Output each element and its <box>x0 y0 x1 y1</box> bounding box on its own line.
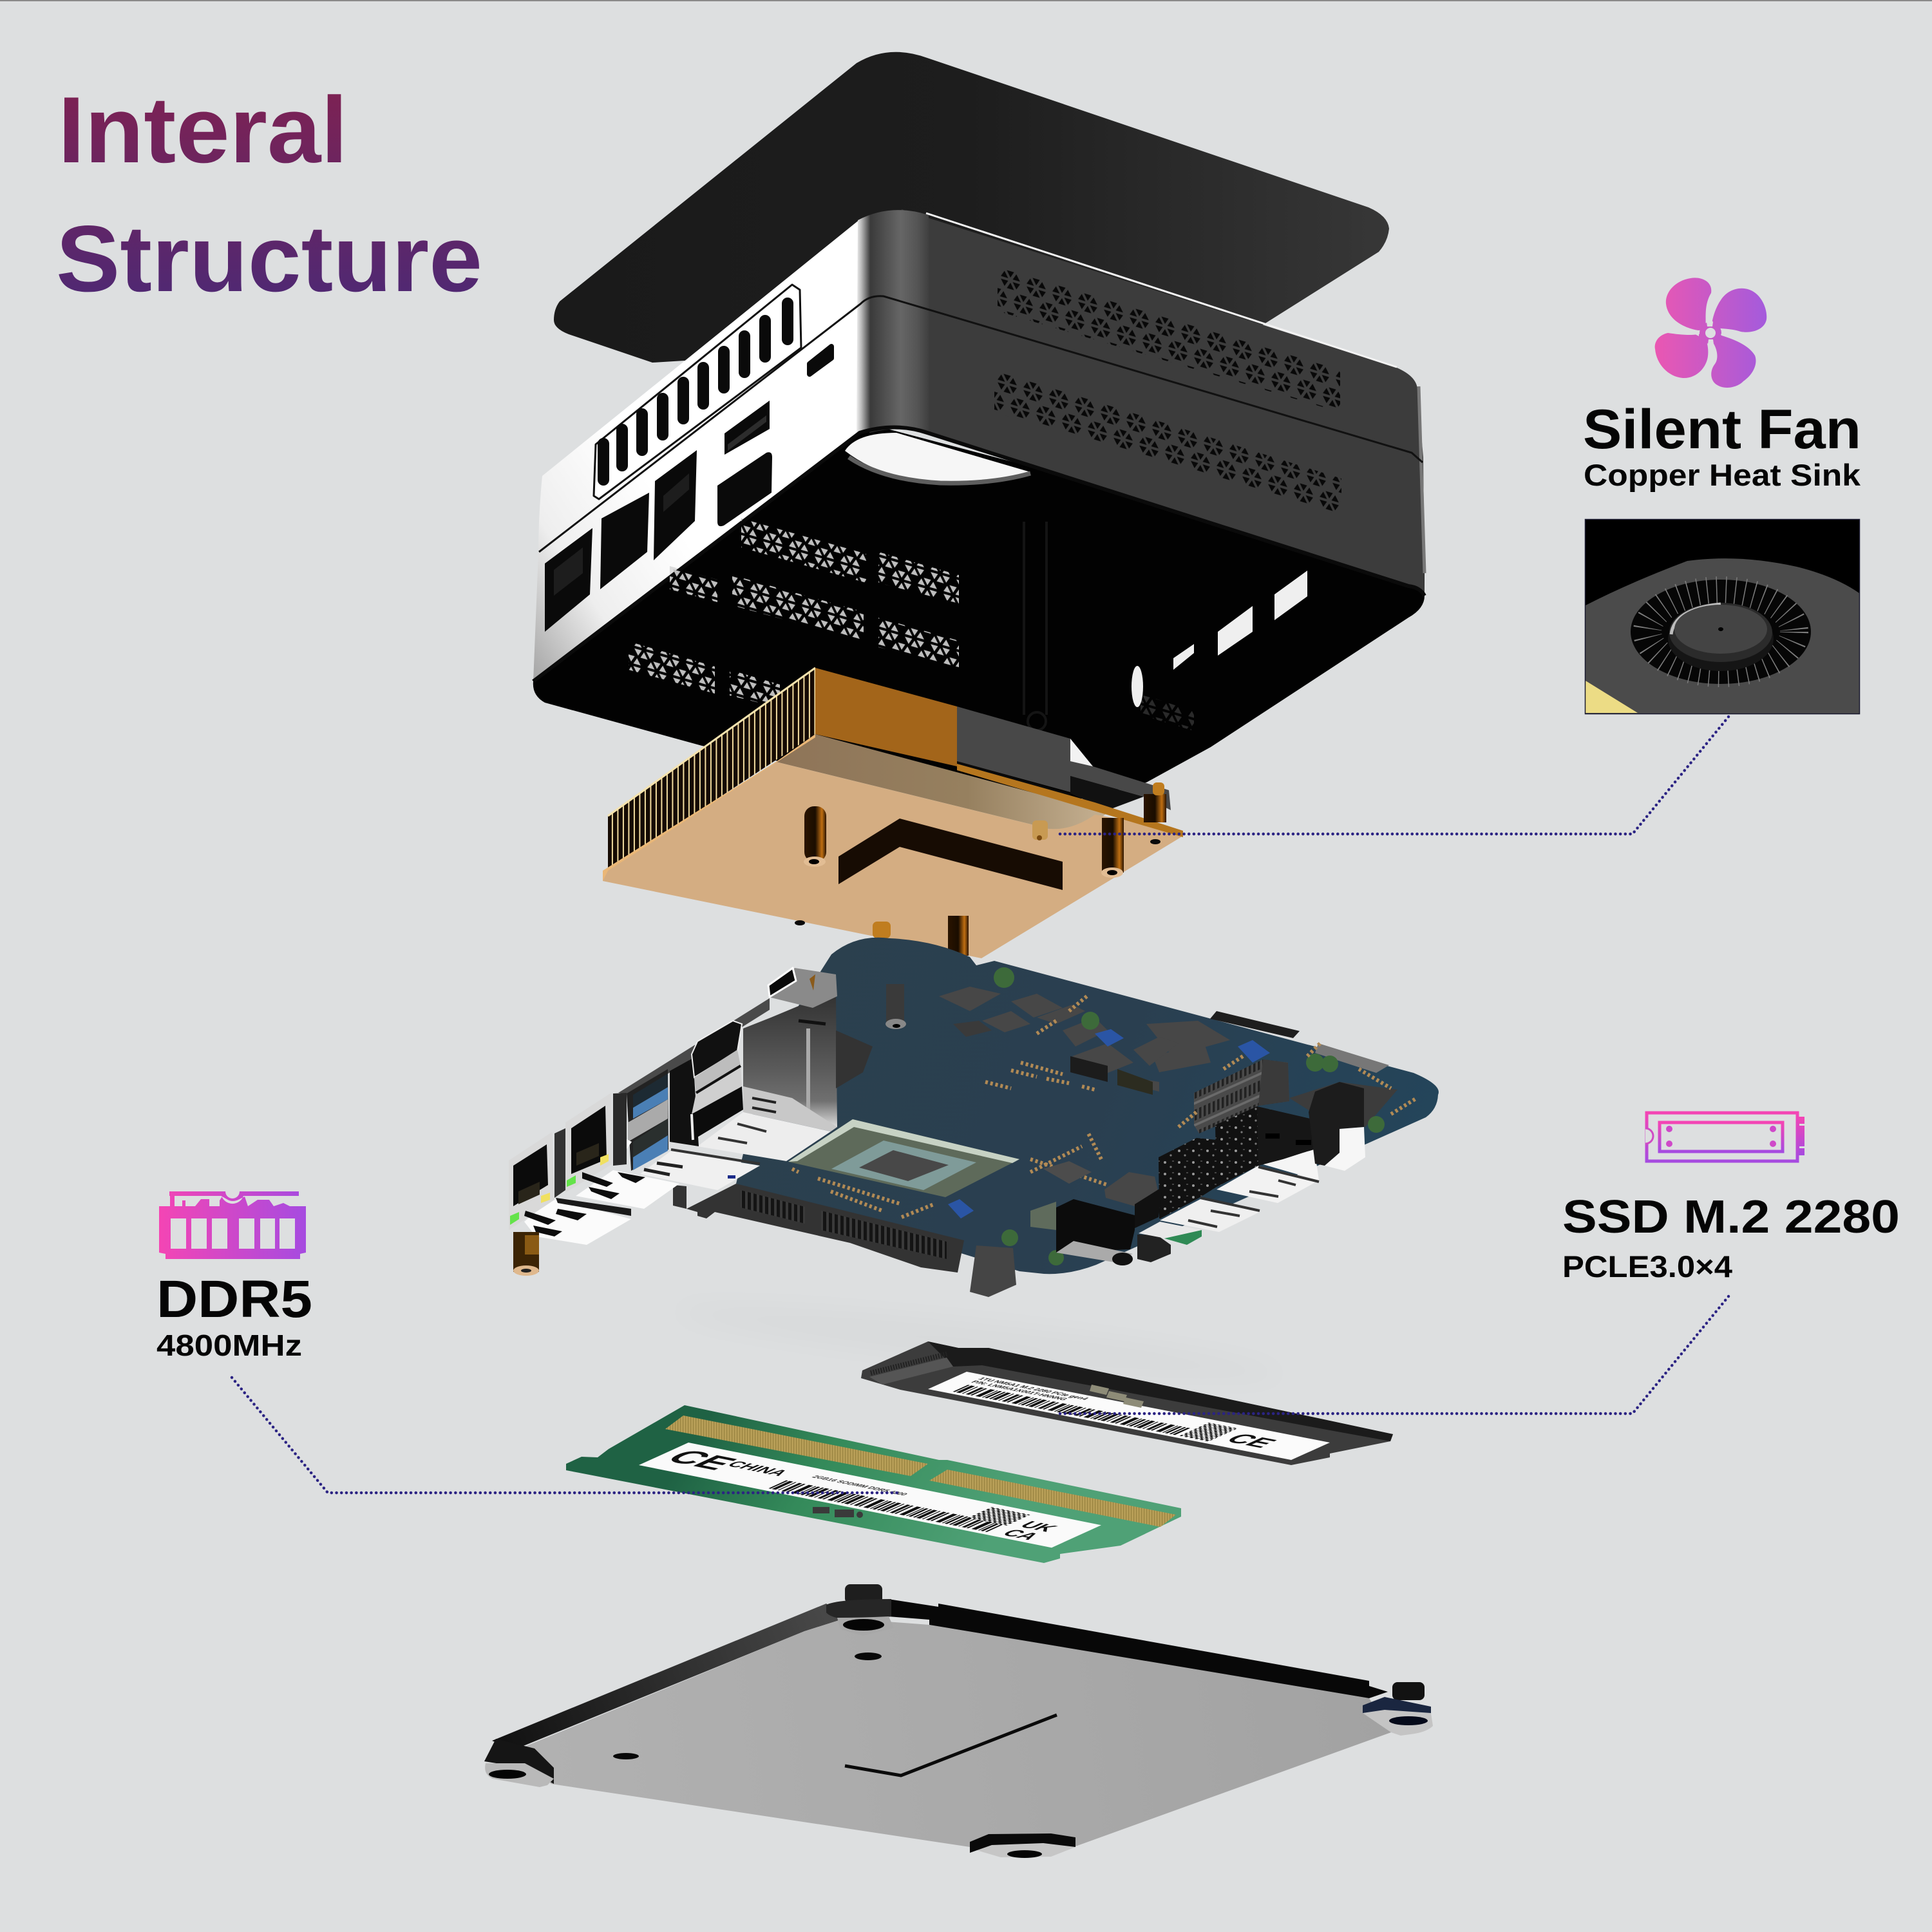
fan housing gray <box>957 706 1171 810</box>
motherboard <box>509 938 1439 1297</box>
dark column <box>670 1058 699 1146</box>
front slots <box>594 285 801 499</box>
top post <box>826 1584 894 1636</box>
brass standoff <box>513 1232 539 1276</box>
white block HDMI <box>697 1112 831 1161</box>
HDMI white A <box>1217 1166 1319 1203</box>
taupe face <box>776 734 1108 832</box>
RAM label: UK <box>1014 1519 1063 1534</box>
plate holes <box>795 839 1160 925</box>
black back edge <box>888 1599 1388 1698</box>
audio jack <box>1056 1199 1171 1265</box>
board edge strip <box>618 998 770 1095</box>
subheading: copper heat sink: Copper Heat Sink <box>1584 458 1861 492</box>
leader: silent fan <box>1060 717 1728 834</box>
blue chips <box>948 1029 1270 1218</box>
M.2 socket <box>1194 1059 1289 1133</box>
LAN port 1 <box>554 1093 679 1209</box>
rear IO openings <box>1132 571 1307 707</box>
RAM chips <box>813 1507 863 1518</box>
green chips <box>994 967 1385 1265</box>
copper pads <box>792 995 1417 1217</box>
case interior <box>533 422 1425 811</box>
SSD label <box>928 1372 1330 1460</box>
side vents <box>994 266 1341 514</box>
block 2 <box>1215 1106 1314 1187</box>
L-shaped slot <box>838 819 1063 890</box>
USB ports <box>619 1069 668 1171</box>
icon: fan <box>1655 278 1766 388</box>
copper heat sink <box>603 668 1183 958</box>
plate surface <box>517 1618 1391 1847</box>
RAM label: 2GB16 SODIMM DDR5 4800 <box>810 1475 909 1497</box>
plate holes <box>613 1653 882 1759</box>
RAM label: CE <box>656 1446 746 1474</box>
title <box>56 77 482 311</box>
HDMI white C <box>1139 1222 1202 1241</box>
title: Interal <box>58 77 348 182</box>
leader: SSD <box>1060 1296 1728 1414</box>
interior rods <box>1024 522 1046 730</box>
standoffs <box>804 782 1166 956</box>
power chips <box>939 987 1230 1092</box>
SSD chips <box>1090 1385 1144 1408</box>
subheading: frequency: 4800MHz <box>156 1329 302 1362</box>
USB white block <box>640 1150 760 1190</box>
heading: DDR5: DDR5 <box>156 1270 312 1329</box>
silver front face <box>533 219 860 681</box>
type-C port <box>768 968 837 1008</box>
screws <box>873 820 1048 938</box>
CPU <box>788 1119 1019 1197</box>
chips near CPU <box>1030 1161 1159 1230</box>
left foot <box>484 1739 554 1787</box>
SSD contacts <box>869 1354 953 1385</box>
front ports <box>545 346 831 632</box>
SSD label: 1TU NM5A1 M.2 2280 PCIe gen4 <box>976 1377 1090 1401</box>
M.2 SSD <box>861 1341 1393 1465</box>
gold contacts <box>665 1416 928 1476</box>
copper strip <box>957 764 1183 837</box>
block 3 <box>1159 1138 1217 1219</box>
seam lines <box>533 296 1425 681</box>
L-shaped groove <box>845 1715 1057 1776</box>
board <box>736 938 1439 1274</box>
title: Structure <box>56 206 482 311</box>
heading: SSD: SSD M.2 2280 <box>1562 1191 1900 1243</box>
HDMI stack <box>692 1021 743 1140</box>
right foot <box>1363 1682 1433 1736</box>
LAN port 2 <box>509 1132 631 1245</box>
lid panel <box>554 52 1389 363</box>
fan crescent <box>845 433 1030 483</box>
RAM label: CA <box>997 1528 1045 1542</box>
top-edge connectors <box>1210 1011 1389 1073</box>
rear connectors <box>1135 1082 1365 1245</box>
RAM label <box>639 1443 1101 1548</box>
RAM label: CHINA <box>723 1459 793 1478</box>
leader: DDR5 <box>232 1378 898 1493</box>
bottom latch <box>970 1245 1016 1297</box>
heading: silent fan: Silent Fan <box>1583 399 1861 460</box>
bottom plate <box>484 1584 1433 1858</box>
dark side face <box>869 209 1425 596</box>
pillar <box>1309 1082 1364 1166</box>
block 2 white fade <box>1258 1143 1319 1180</box>
corner column <box>857 210 929 434</box>
fins <box>608 668 815 871</box>
plate left ledge <box>492 1604 845 1750</box>
icon: SSD <box>1645 1113 1804 1161</box>
SSD label: CE <box>1218 1431 1283 1450</box>
black chips <box>1070 1056 1108 1082</box>
copper plate <box>603 762 1183 958</box>
HDMI white B <box>1160 1199 1260 1232</box>
white edge highlight <box>926 213 1397 367</box>
tall metal connector <box>743 996 873 1132</box>
subheading: PCIe: PCLE3.0×4 <box>1562 1249 1732 1283</box>
copper top face <box>815 668 957 766</box>
interior vent clusters <box>629 518 1194 731</box>
front foot <box>970 1833 1075 1858</box>
panel: fan close-up <box>1585 519 1860 714</box>
fan opening <box>1631 580 1811 684</box>
centre standoff <box>886 984 906 1029</box>
DDR5 memory module <box>566 1405 1181 1563</box>
SATA connector <box>673 1184 964 1273</box>
SSD label: P/N: LNM5A1X001T-HNNNG <box>969 1380 1069 1401</box>
icon: RAM <box>159 1191 306 1259</box>
case body <box>533 209 1425 811</box>
